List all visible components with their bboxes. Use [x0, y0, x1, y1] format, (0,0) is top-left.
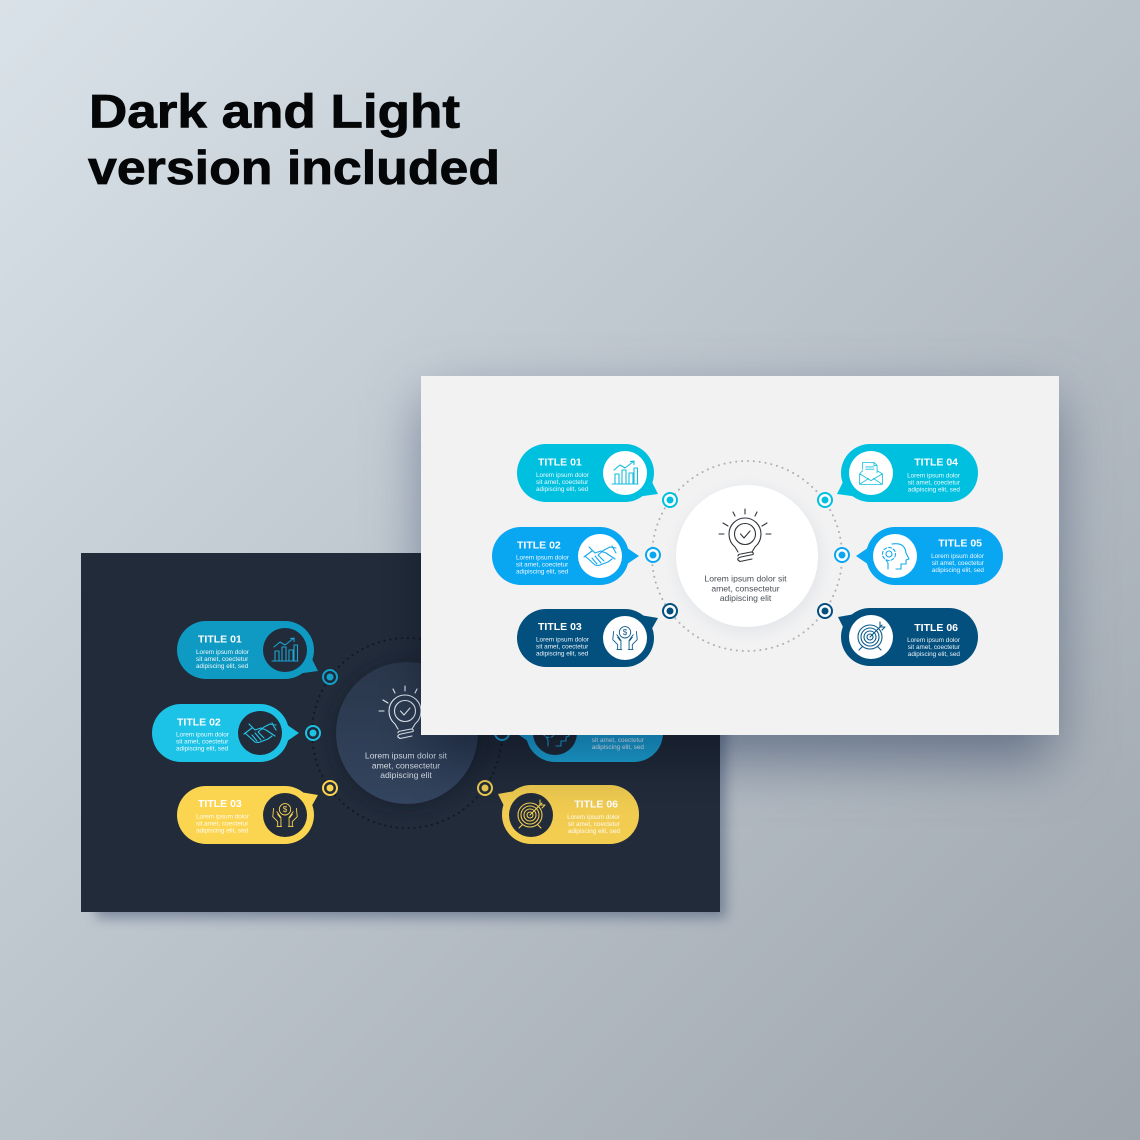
- pill: dark title 03: adipiscing elit, sed: [196, 828, 249, 834]
- pill: light title 03: adipiscing elit, sed: [536, 650, 589, 658]
- marker: light 05: [835, 548, 849, 562]
- pill: dark title 03: TITLE 03: [198, 798, 242, 810]
- dotted orbit: dark: [312, 638, 502, 828]
- title: Dark and Light: [89, 84, 460, 138]
- pill: light title 05: sit amet, coectetur: [932, 560, 985, 567]
- pill: dark title 06: Lorem ipsum dolor: [567, 814, 621, 821]
- pill: light title 03: sit amet, coectetur: [536, 644, 589, 650]
- pill: dark title 06: TITLE 06: [574, 798, 618, 810]
- pill: dark title 01: sit amet, coectetur: [196, 656, 249, 663]
- pill: dark title 02: adipiscing elit, sed: [176, 746, 229, 752]
- marker: dark 06: [478, 781, 492, 795]
- pill: dark title 01: Lorem ipsum dolor: [196, 649, 250, 656]
- pill: light title 04: [837, 444, 978, 502]
- marker: dark 01: [323, 670, 337, 684]
- pill: light title 03: TITLE 03: [538, 621, 582, 633]
- pill: dark title 05: adipiscing elit, sed: [592, 744, 644, 751]
- center circle: dark: adipiscing elit: [380, 770, 432, 780]
- pill: dark title 01: TITLE 01: [198, 634, 242, 646]
- pill: light title 02: Lorem ipsum dolor: [516, 554, 570, 562]
- center circle: dark: Lorem ipsum dolor sit: [365, 750, 448, 760]
- pill: light title 02: [492, 527, 639, 585]
- marker: light 03: [663, 604, 677, 618]
- pill: dark title 06: adipiscing elit, sed: [568, 828, 620, 835]
- pill: light title 03: Lorem ipsum dolor: [536, 636, 590, 644]
- panel: light version: [421, 376, 1059, 735]
- pill: light title 05: [856, 527, 1003, 585]
- title: version included: [88, 141, 500, 194]
- pill: light title 06: TITLE 06: [914, 622, 958, 634]
- pill: light title 04: Lorem ipsum dolor: [907, 472, 961, 480]
- marker: dark 02: [306, 726, 320, 740]
- pill: light title 04: TITLE 04: [914, 456, 958, 468]
- center circle: light: Lorem ipsum dolor sit: [704, 574, 787, 584]
- panel: dark version: [81, 553, 726, 918]
- pill: light title 06: Lorem ipsum dolor: [907, 637, 961, 644]
- pill: dark title 05: sit amet, coectetur: [592, 737, 645, 744]
- marker: light 02: [646, 548, 660, 562]
- center circle: light: [675, 485, 823, 634]
- pill: light title 06: adipiscing elit, sed: [908, 651, 960, 658]
- center circle: light: adipiscing elit: [720, 593, 772, 603]
- pill: light title 04: adipiscing elit, sed: [908, 486, 960, 494]
- pill: dark title 02: [152, 704, 299, 762]
- pill: light title 05: Lorem ipsum dolor: [931, 553, 985, 560]
- pill: light title 01: [517, 444, 658, 502]
- dotted orbit: light: [652, 461, 842, 651]
- pill: dark title 06: [498, 785, 639, 844]
- pill: light title 05: TITLE 05: [938, 538, 982, 550]
- pill: light title 01: TITLE 01: [538, 456, 582, 468]
- marker: dark 03: [323, 781, 337, 795]
- pill: dark title 01: adipiscing elit, sed: [196, 663, 249, 670]
- pill: light title 02: TITLE 02: [517, 540, 561, 552]
- pill: dark title 03: sit amet, coectetur: [196, 820, 249, 828]
- panel shadow: light version: [425, 400, 1055, 760]
- pill: light title 02: adipiscing elit, sed: [516, 568, 569, 576]
- pill: dark title 05: [516, 704, 663, 762]
- title: [88, 84, 500, 194]
- pill: dark title 02: TITLE 02: [177, 716, 221, 728]
- pill: dark title 02: sit amet, coectetur: [176, 738, 229, 746]
- pill: light title 04: sit amet, coectetur: [908, 480, 961, 486]
- pill: light title 06: sit amet, coectetur: [908, 644, 961, 651]
- pill: dark title 03: [177, 786, 318, 844]
- marker: light 06: [818, 604, 832, 618]
- center circle: dark: [332, 660, 482, 810]
- pill: light title 01: adipiscing elit, sed: [536, 486, 589, 493]
- pill: light title 05: adipiscing elit, sed: [932, 567, 984, 574]
- pill: light title 06: [838, 608, 978, 666]
- marker: light 01: [663, 493, 677, 507]
- pill: light title 01: sit amet, coectetur: [536, 479, 589, 486]
- marker: light 04: [818, 493, 832, 507]
- center circle: dark: amet, consectetur: [372, 760, 440, 770]
- pill: light title 02: sit amet, coectetur: [516, 562, 569, 568]
- pill: light title 03: [517, 609, 658, 667]
- pill: dark title 02: Lorem ipsum dolor: [176, 732, 230, 738]
- pill: dark title 01: [177, 621, 318, 679]
- marker: dark 05: [495, 726, 509, 740]
- center circle: light: amet, consectetur: [711, 584, 780, 594]
- pill: light title 01: Lorem ipsum dolor: [536, 472, 590, 479]
- pill: dark title 06: sit amet, coectetur: [568, 821, 621, 828]
- pill: dark title 03: Lorem ipsum dolor: [196, 814, 250, 820]
